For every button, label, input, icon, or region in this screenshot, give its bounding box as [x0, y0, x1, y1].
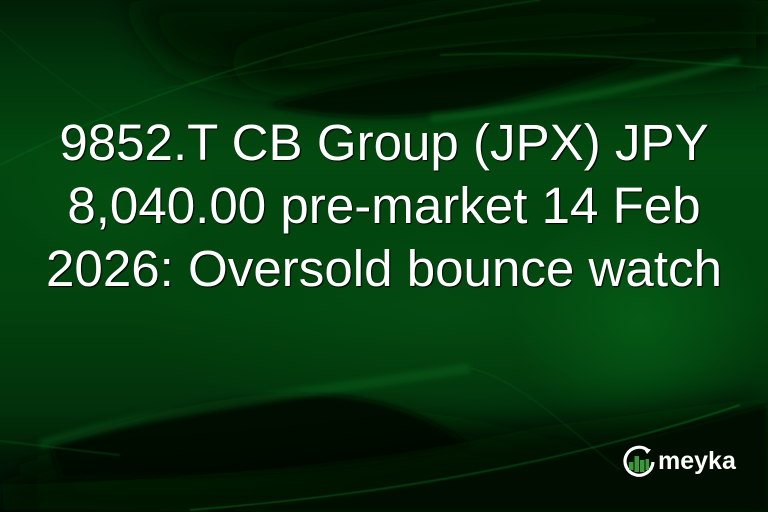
top dark mass: [130, 0, 768, 112]
title: [46, 114, 722, 297]
light streaks: [0, 0, 540, 165]
title: 2026: Oversold bounce watch: [46, 240, 722, 297]
brand name: meyka: [658, 447, 736, 475]
logo: meyka: [623, 446, 736, 477]
icon: ring with bars: [623, 446, 655, 477]
bottom dark mass: [20, 420, 748, 512]
title: 8,040.00 pre-market 14 Feb: [67, 177, 701, 234]
title: 9852.T CB Group (JPX) JPY: [59, 114, 709, 171]
